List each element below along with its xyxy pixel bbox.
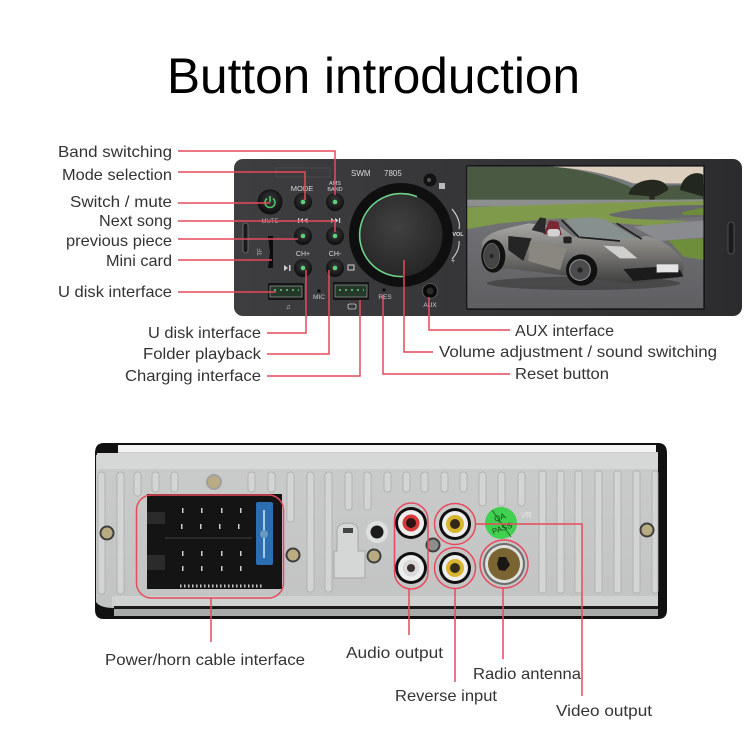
callout: Audio output [346,589,444,662]
hole: reset [378,288,392,301]
callout: Volume adjustment [404,260,717,361]
callout: Band switching [58,144,335,195]
jack: yellow reverse [434,548,476,588]
callout: Mode selection: Mode selection [62,167,172,184]
slot: TF card: TF [258,248,264,256]
callout: Folder playback: Folder playback [143,346,262,363]
callout: Video output [476,524,653,720]
callout: Reverse input [395,589,498,705]
hole: MIC [313,289,325,301]
slot: TF card [258,236,273,268]
knob: volume: + [451,258,455,265]
callout: Next song: Next song [99,213,172,230]
callout: Power/horn cable interface: Power/horn cable interface [105,652,305,669]
callout: Charging interface: Charging interface [125,368,261,385]
button: CH-: CH- [329,251,342,258]
title: Button introduction [167,48,580,104]
slot: right capsule [728,222,734,254]
callout: Volume adjustment: Volume adjustment / sound switching [439,344,717,361]
port: USB left: ♫ [285,304,291,311]
hole: reset: RES [378,294,392,301]
connector: power/horn [136,494,284,598]
callout: Radio antenna [473,588,581,683]
callout: Band switching: Band switching [58,144,172,161]
callout: Reset button [383,295,609,383]
outline: audio output [394,503,428,589]
callout: Video output: Video output [556,703,653,720]
callout: Audio output: Audio output [346,645,444,662]
callout: Charging interface [125,300,360,385]
callout: Folder playback [143,270,329,363]
button: AMS band [326,181,344,211]
port: USB right [333,282,369,309]
panel: rear of radio [95,443,667,619]
callout: AUX interface: AUX interface [515,323,614,340]
button: power mute: MUTE [262,219,278,225]
callout: AUX interface [429,297,614,340]
jack: yellow video [434,504,476,544]
fuse [256,502,273,565]
callout: Mode selection [62,167,305,200]
hole: MIC: MIC [313,294,325,301]
button: mode: MODE [291,184,313,193]
knob: volume [349,183,464,287]
sticker: QA pass [485,507,532,539]
sensor: remote receiver [424,174,445,189]
car body [481,217,684,290]
slot: capsule [243,223,248,253]
text: model name: SWM [351,169,371,178]
callout: Radio antenna: Radio antenna [473,666,581,683]
button: mode [291,184,313,211]
callout: U disk interface bottom: U disk interface [148,325,261,342]
text: model name [351,169,402,178]
button: CH+: CH+ [296,251,310,258]
callout: Switch / mute: Switch / mute [70,194,172,211]
jack: white audio [395,552,427,584]
callout: U disk interface bottom [148,270,306,342]
button: AMS band: AMS [329,181,341,187]
port: USB left [268,283,304,311]
button: CH+ [284,251,312,277]
screws [100,475,654,562]
display: car photograph [467,167,703,308]
callout: Mini card: Mini card [106,253,172,270]
button: power mute [258,190,282,225]
callout: previous piece: previous piece [66,233,172,250]
text: model name: 7805 [384,169,402,178]
knob: volume: VOL [452,232,464,238]
port: AUX [422,284,438,309]
callout: Reverse input: Reverse input [395,688,498,705]
sticker: QA pass: QA [493,511,507,524]
sticker: QA pass: PASS [491,521,513,536]
callout: Next song [99,213,335,232]
callout: U disk interface left: U disk interface [58,284,172,301]
button: next [326,218,344,245]
callout: Reset button: Reset button [515,366,609,383]
jack: radio antenna [480,540,528,588]
panel: front of radio [234,159,742,316]
sticker: QA pass: VR [520,511,532,520]
bracket slot and hole [334,521,388,578]
cooling ribs [98,471,658,594]
screen bezel [466,165,705,310]
jack: red audio [395,507,427,539]
button: CH- [326,251,354,277]
button: previous [294,218,312,245]
button: AMS band: BAND [327,187,343,193]
port: AUX: AUX [423,302,437,309]
